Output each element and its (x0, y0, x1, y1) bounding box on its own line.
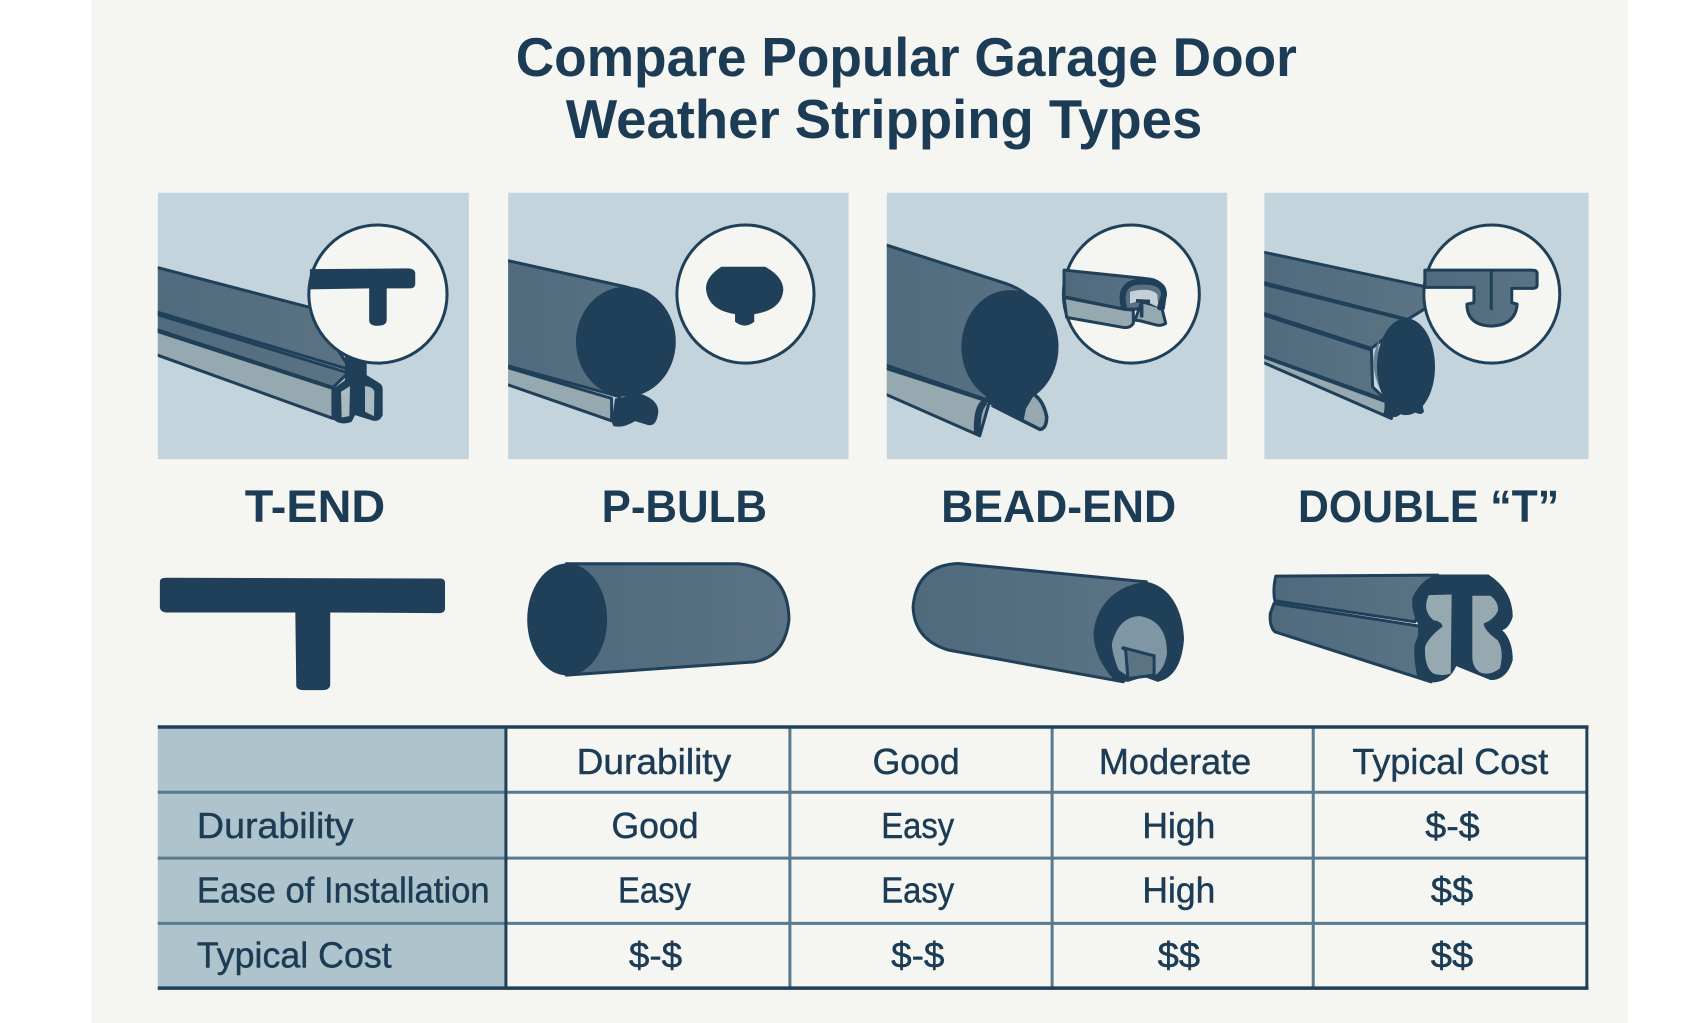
P-Bulb foot section (612, 394, 658, 427)
T-End foot section (332, 353, 383, 423)
table header row (577, 742, 1548, 782)
table row: Durability: Easy (881, 806, 954, 846)
icon: Bead-End profile lens (1063, 225, 1199, 363)
table row: Typical Cost: Typical Cost (197, 935, 392, 975)
profile: P-Bulb cylinder (527, 563, 789, 675)
table header row: Moderate (1099, 742, 1251, 782)
Bead-End lens section (1064, 270, 1166, 328)
table header row: Typical Cost (1352, 742, 1548, 782)
panel: Double T illustration (1254, 193, 1588, 459)
table row: Durability: Good (611, 806, 699, 846)
heading: P-BULB: P-BULB (602, 481, 767, 532)
panel: Bead-End illustration (876, 193, 1227, 459)
heading: DOUBLE "T": DOUBLE “T” (1298, 481, 1559, 532)
panel: T-End illustration (148, 193, 469, 459)
table row: Typical Cost: $-$ (629, 935, 682, 975)
table header row: Durability (577, 742, 731, 782)
Bead-End foot section (974, 394, 1048, 434)
table row: Durability (197, 806, 1480, 846)
icon: Double T profile lens (1424, 225, 1560, 363)
table row: Ease of Installation: $$ (1431, 871, 1473, 911)
table row: Typical Cost: $$ (1158, 935, 1200, 975)
table row: Ease of Installation: Easy (618, 871, 691, 911)
table row: Ease of Installation (197, 871, 1473, 911)
table header row: Good (873, 742, 960, 782)
profile: Double T section (1270, 574, 1513, 682)
table row: Durability: Durability (197, 806, 354, 846)
title (516, 27, 1297, 150)
panel: P-Bulb illustration (499, 193, 849, 459)
icon: T-End profile lens (309, 225, 447, 363)
Double T end section (1374, 318, 1435, 417)
table row: Ease of Installation: High (1142, 871, 1215, 911)
table row: Durability: High (1142, 806, 1215, 846)
comparison table (158, 727, 1588, 988)
table row: Typical Cost (197, 935, 1473, 975)
table row: Typical Cost: $$ (1431, 935, 1473, 975)
profile: T-End cross-section (160, 578, 445, 690)
table row: Ease of Installation: Easy (881, 871, 954, 911)
heading: T-END: T-END (245, 481, 385, 532)
heading: BEAD-END: BEAD-END (941, 481, 1176, 532)
title: Weather Stripping Types (566, 89, 1202, 150)
table row: Ease of Installation: Ease of Installation (197, 871, 490, 911)
table row: Durability: $-$ (1425, 806, 1480, 846)
table row: Typical Cost: $-$ (891, 935, 944, 975)
title: Compare Popular Garage Door (516, 27, 1297, 88)
profile: Bead-End section (913, 563, 1184, 682)
icon: P-Bulb profile lens (677, 225, 814, 363)
